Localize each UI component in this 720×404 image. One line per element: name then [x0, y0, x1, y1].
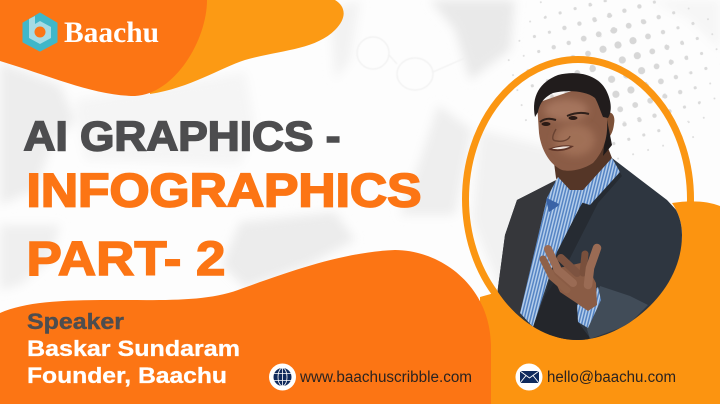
lapel	[545, 158, 622, 296]
left collar	[547, 177, 570, 206]
title: PART- 2: PART- 2	[26, 232, 226, 286]
portrait: speaker	[497, 73, 690, 345]
title: INFOGRAPHICS: INFOGRAPHICS	[26, 164, 422, 218]
shadow behind jaw	[603, 120, 612, 156]
halftone dots	[507, 0, 720, 168]
logo wordmark: Baachu	[64, 16, 159, 49]
face	[537, 88, 607, 171]
logo: Baachu hexagon	[23, 13, 57, 51]
speaker role: Founder, Baachu	[27, 363, 227, 388]
right collar	[582, 158, 620, 205]
ear	[606, 112, 614, 136]
faded glasses	[357, 37, 465, 90]
faded background photo	[0, 0, 720, 290]
top blob: dark orange	[0, 0, 207, 96]
hair	[534, 73, 611, 118]
hand	[543, 248, 597, 311]
email: hello@baachu.com	[547, 369, 676, 386]
jacket lower centre	[533, 284, 590, 340]
icon: globe	[269, 364, 296, 390]
icon: envelope	[516, 364, 542, 390]
title: AI GRAPHICS: AI GRAPHICS -	[24, 112, 340, 160]
mouth	[548, 145, 574, 151]
jacket	[497, 158, 690, 345]
nose	[553, 129, 570, 141]
eyebrows	[540, 113, 589, 122]
speaker label: Speaker	[27, 309, 124, 334]
face highlights	[544, 99, 588, 121]
bottom blob: dark orange	[0, 250, 491, 404]
shirt inner navy collar	[546, 198, 559, 212]
jacket left panel	[497, 180, 556, 318]
eyes	[542, 122, 550, 126]
website: www.baachuscribble.com	[299, 369, 472, 386]
top blob: light orange	[150, 0, 344, 94]
cuff	[577, 287, 601, 328]
neck	[553, 140, 612, 190]
speaker name: Baskar Sundaram	[27, 336, 240, 361]
sleeve	[586, 286, 648, 339]
bottom blob: light orange	[480, 201, 720, 404]
portrait ring	[466, 60, 690, 338]
shirt	[520, 158, 612, 327]
